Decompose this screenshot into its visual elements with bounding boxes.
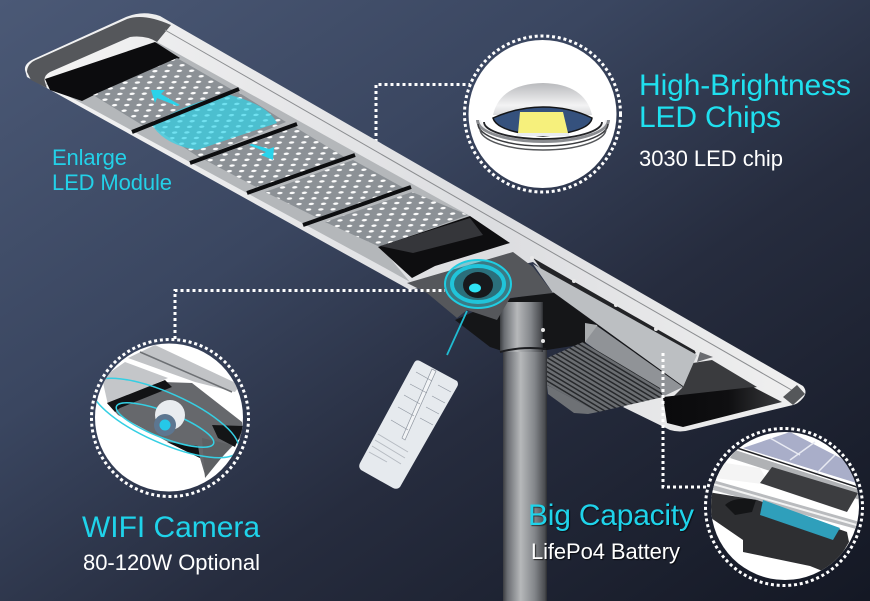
callout: camera circle [82, 340, 248, 496]
battery box [547, 323, 683, 414]
connector: battery [663, 353, 708, 487]
camera illustration [96, 345, 242, 478]
housing [407, 252, 553, 320]
underside black [663, 387, 782, 427]
heading: High-Brightness LED Chips [639, 69, 851, 134]
heading: Big Capacity: Big Capacity [528, 499, 694, 532]
callout: battery circle [706, 428, 862, 586]
connector: camera [175, 290, 445, 339]
pointer line to remote [447, 311, 467, 355]
connector: LED chips [376, 84, 470, 184]
strip line [165, 30, 795, 392]
underside dark panel [670, 360, 757, 400]
chrome tip [783, 385, 805, 405]
LED modules [93, 58, 468, 247]
text: 80-120W Optional: 80-120W Optional [83, 550, 260, 575]
enlarge arrows [151, 90, 274, 160]
label: Enlarge LED Module [52, 145, 172, 195]
inner frame [45, 42, 470, 282]
end cap [27, 17, 171, 88]
module dividers [132, 89, 411, 225]
battery illustration [708, 432, 860, 574]
label: Enlarge LED Module: LED Module [52, 170, 172, 195]
text: LifePo4 Battery: LifePo4 Battery [531, 539, 680, 564]
label: Enlarge LED Module: Enlarge [52, 145, 127, 170]
lamp head [25, 13, 805, 431]
black panel near housing [378, 216, 510, 278]
arm [533, 264, 697, 387]
small bracket [697, 352, 713, 362]
heading: High-Brightness LED Chips: High-Brightness [639, 69, 851, 102]
heading: WIFI Camera: WIFI Camera [82, 511, 260, 544]
remote control [359, 360, 458, 489]
dark rail [533, 258, 697, 358]
callout: LED chip circle [464, 36, 620, 192]
street light pole [500, 302, 547, 601]
bracket and arm [407, 252, 713, 387]
black end panel [45, 42, 180, 101]
under-bracket [455, 293, 600, 352]
text: 3030 LED chip: 3030 LED chip [639, 146, 783, 171]
highlighted LED module [152, 95, 277, 150]
bolts [530, 256, 699, 353]
lens illustration [478, 83, 608, 150]
heading: High-Brightness LED Chips: LED Chips [639, 101, 781, 134]
lamp shell [25, 13, 805, 431]
camera ring [445, 260, 511, 308]
